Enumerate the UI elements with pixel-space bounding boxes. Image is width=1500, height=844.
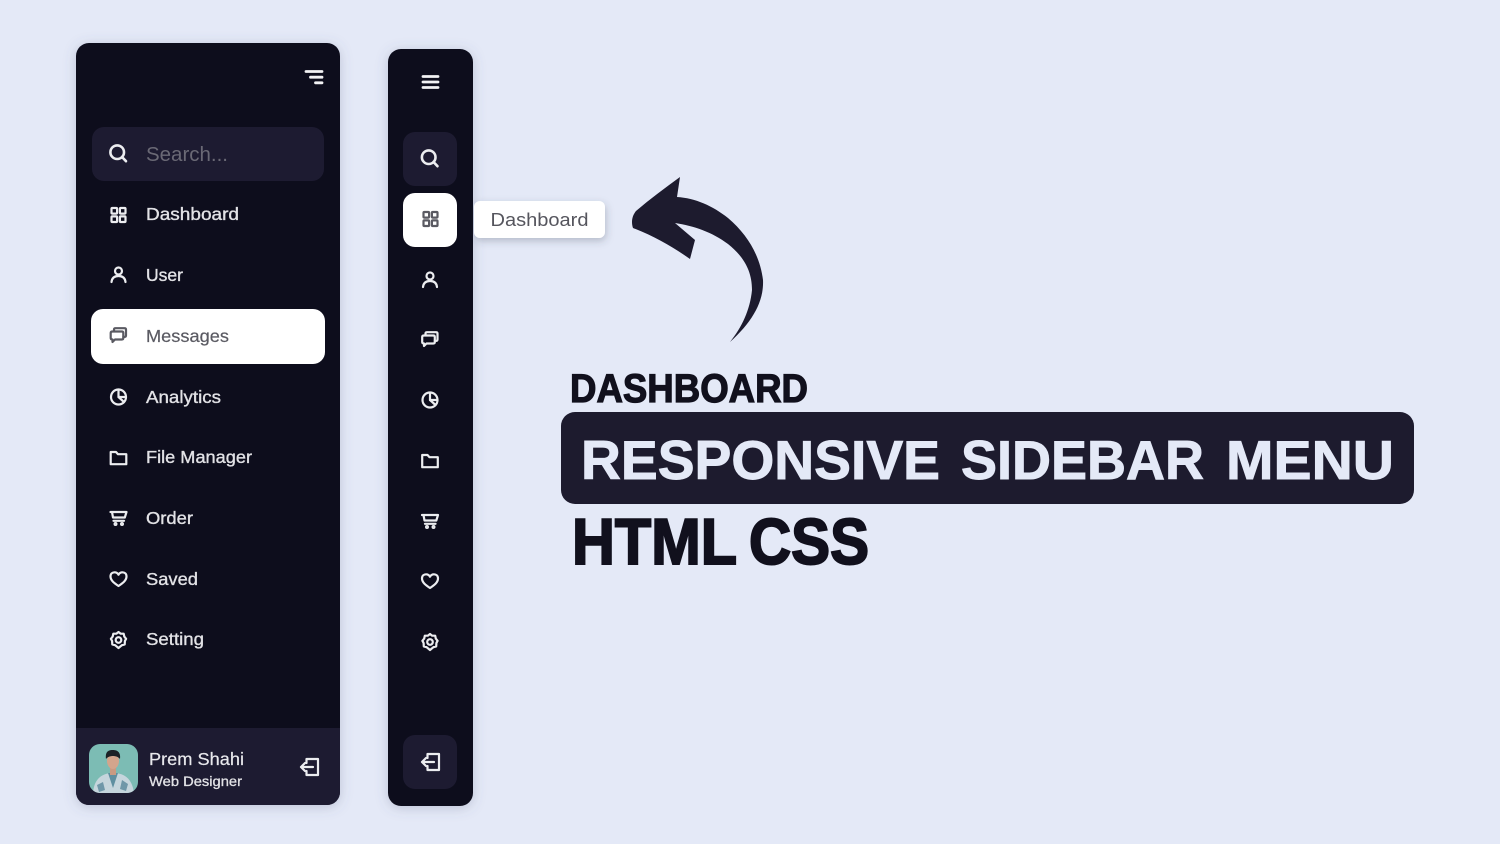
panel: collapsed sidebar	[388, 49, 473, 806]
nav item: Messages (active)	[91, 309, 325, 364]
nav item: Order	[110, 508, 193, 528]
icon: messages	[422, 332, 438, 346]
nav item: Saved: Saved	[146, 569, 198, 589]
heading: HTML CSS	[572, 505, 869, 578]
nav item: Dashboard	[112, 204, 239, 224]
avatar photo	[89, 744, 138, 793]
nav item: Dashboard: Dashboard	[146, 204, 239, 224]
nav item: Saved	[110, 569, 198, 589]
profile footer: Prem Shahi	[149, 749, 244, 769]
search box	[92, 127, 324, 181]
title banner: RESPONSIVE SIDEBAR MENU: RESPONSIVE	[581, 429, 940, 491]
heading: HTML CSS: HTML	[572, 505, 737, 578]
nav item: Analytics: Analytics	[146, 387, 221, 407]
title banner: RESPONSIVE SIDEBAR MENU	[561, 412, 1414, 504]
nav item: User	[112, 265, 183, 285]
heading: HTML CSS: CSS	[749, 505, 869, 578]
profile footer	[76, 728, 340, 805]
dashboard button (hover)	[403, 193, 457, 247]
arrow	[632, 177, 763, 342]
icon: collapse toggle	[306, 72, 322, 83]
nav item: File Manager: File Manager	[146, 447, 252, 467]
collapsed sidebar body	[388, 49, 473, 806]
sidebar body	[76, 43, 340, 805]
nav item: Setting: Setting	[146, 629, 204, 649]
nav item: Messages (active): Messages	[146, 326, 229, 346]
nav item: User: User	[146, 265, 183, 285]
nav item: Setting	[111, 629, 204, 649]
search button	[403, 132, 457, 186]
icon: file manager	[422, 455, 438, 467]
title banner: RESPONSIVE SIDEBAR MENU: MENU	[1226, 429, 1394, 491]
heading: DASHBOARD: DASHBOARD	[570, 367, 808, 411]
profile footer: Web Designer	[149, 773, 242, 789]
tooltip: Dashboard	[474, 201, 605, 238]
icon: hamburger menu	[423, 76, 438, 88]
nav item: Analytics	[111, 387, 221, 407]
icon: saved	[422, 574, 438, 588]
panel: expanded sidebar	[76, 43, 340, 805]
tooltip: Dashboard: Dashboard	[490, 209, 588, 230]
nav item: Order: Order	[146, 508, 193, 528]
title banner: RESPONSIVE SIDEBAR MENU: SIDEBAR	[961, 429, 1204, 491]
search box: Search...	[146, 144, 228, 166]
icon: user	[423, 272, 437, 287]
icon: order	[422, 515, 438, 528]
icon: setting	[422, 634, 438, 650]
icon: analytics	[422, 392, 438, 408]
logout button	[403, 735, 457, 789]
